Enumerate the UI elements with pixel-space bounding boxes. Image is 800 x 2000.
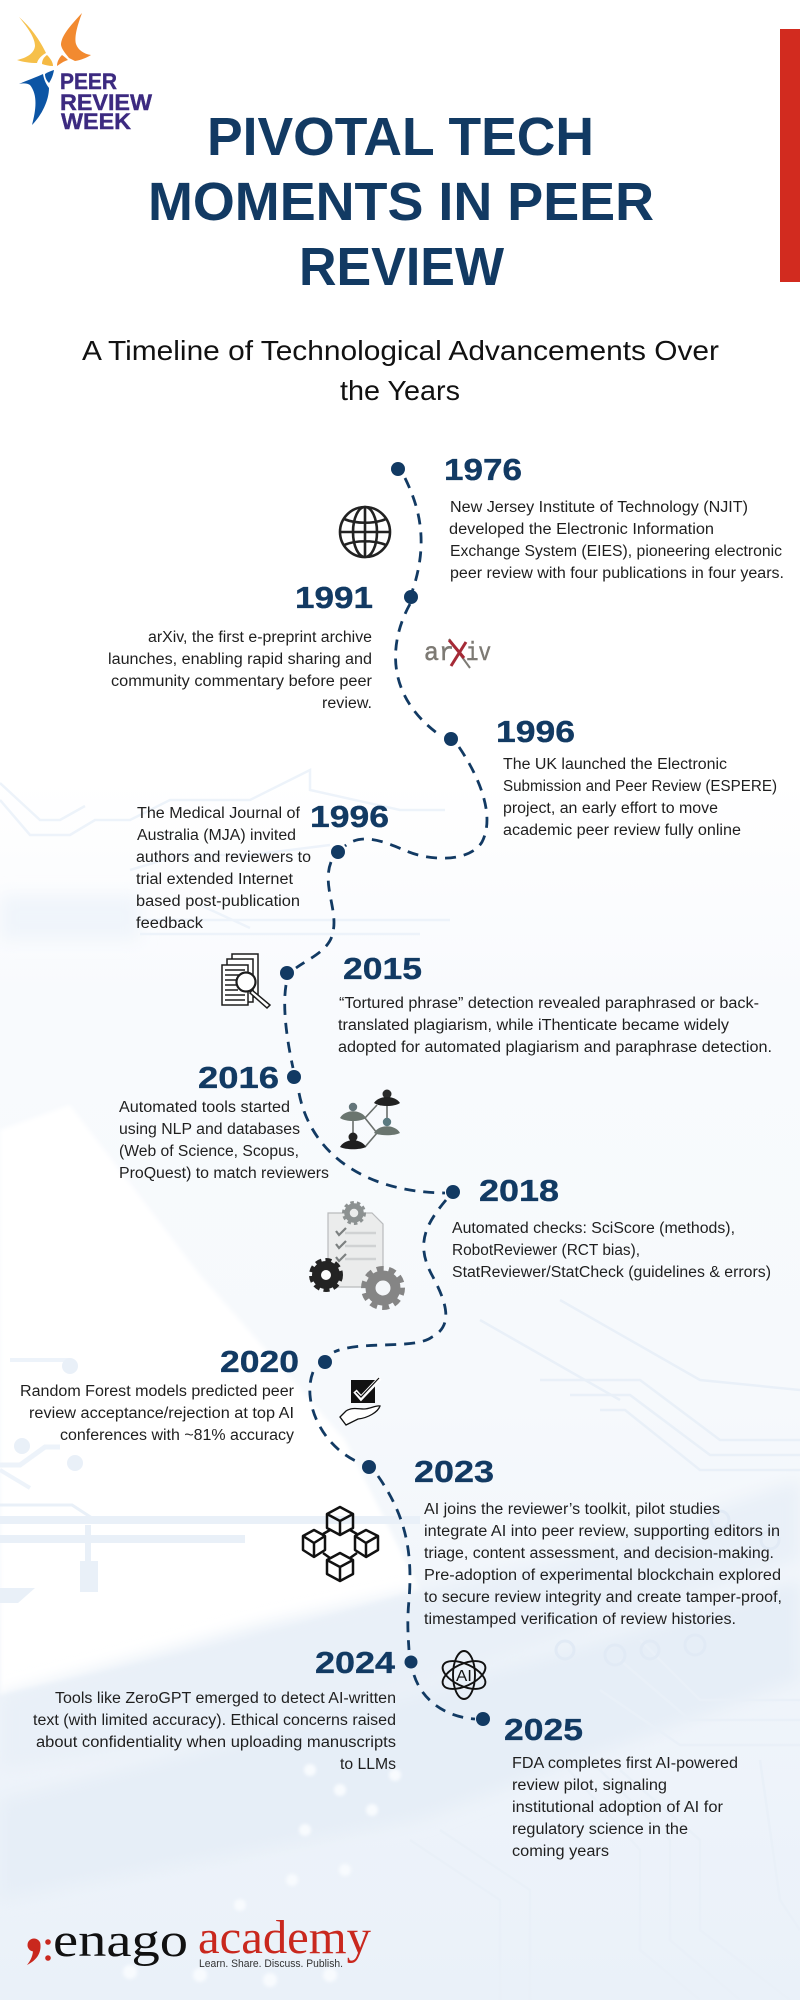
title: MOMENTS IN PEER xyxy=(148,172,654,232)
entry: 2025: institutional adoption of AI for xyxy=(512,1799,723,1816)
entry: 2020: 2020 xyxy=(220,1344,299,1379)
entry: 1976: developed the Electronic Information xyxy=(449,521,714,538)
entry: 2015: translated plagiarism, while iThenticate became widely xyxy=(338,1017,729,1034)
entry: 2015 xyxy=(338,951,772,1056)
entry: 2018: 2018 xyxy=(479,1173,559,1208)
entry: 1996 UK ESPERE: Submission and Peer Review (ESPERE) xyxy=(503,778,777,795)
entry: 1976 xyxy=(444,452,784,582)
entry: 1991 xyxy=(108,580,373,712)
entry: 2024: Tools like ZeroGPT emerged to detect AI-written xyxy=(55,1690,396,1707)
entry: 2015: adopted for automated plagiarism and paraphrase detection. xyxy=(338,1039,772,1056)
entry: 2024: 2024 xyxy=(315,1645,396,1680)
entry: 2016: (Web of Science, Scopus, xyxy=(119,1143,299,1160)
entry: 2018: RobotReviewer (RCT bias), xyxy=(452,1242,640,1259)
entry: 2024: about confidentiality when uploading manuscripts xyxy=(36,1734,396,1751)
entry: 1996 MJA: feedback xyxy=(136,915,203,932)
entry: 1976: 1976 xyxy=(444,452,522,487)
entry: 2018 xyxy=(452,1173,771,1281)
entry: 2023: to secure review integrity and create tamper-proof, xyxy=(424,1589,782,1606)
entry: 2016: ProQuest) to match reviewers xyxy=(119,1165,329,1182)
entry: 1996 MJA: trial extended Internet xyxy=(136,871,294,888)
entry: 1976: New Jersey Institute of Technology (NJIT) xyxy=(450,499,748,516)
title xyxy=(148,107,654,297)
entry: 2023: integrate AI into peer review, supporting editors in xyxy=(424,1523,780,1540)
logo: Peer Review Week xyxy=(17,13,152,134)
entry: 2023: triage, content assessment, and decision-making. xyxy=(424,1545,774,1562)
entry: 2025 xyxy=(504,1712,738,1860)
icon: AI atom: AI xyxy=(456,1668,472,1685)
entry: 2016: using NLP and databases xyxy=(119,1121,300,1138)
entry: 2025: 2025 xyxy=(504,1712,583,1747)
entry: 1996 MJA xyxy=(136,799,389,932)
logo: enago academy: Learn. Share. Discuss. Publish. xyxy=(199,1958,343,1970)
entry: 1996 UK ESPERE: project, an early effort to move xyxy=(503,800,718,817)
icon: AI atom xyxy=(439,1651,489,1699)
entry: 1996 MJA: 1996 xyxy=(310,799,389,834)
entry: 1976: peer review with four publications in four years. xyxy=(450,565,784,582)
entry: 2025: FDA completes first AI-powered xyxy=(512,1755,738,1772)
icon: arXiv logo xyxy=(424,638,491,668)
entry: 1996 UK ESPERE: academic peer review fully online xyxy=(503,822,741,839)
entry: 2023 xyxy=(414,1454,782,1628)
entry: 2016 xyxy=(119,1060,329,1182)
icon: people network xyxy=(340,1090,400,1149)
entry: 1991: launches, enabling rapid sharing and xyxy=(108,651,372,668)
red accent bar xyxy=(780,29,800,282)
entry: 1996 UK ESPERE xyxy=(496,714,777,839)
entry: 2020 xyxy=(20,1344,299,1444)
entry: 2016: Automated tools started xyxy=(119,1099,290,1116)
entry: 2020: review acceptance/rejection at top AI xyxy=(29,1405,294,1422)
entry: 2025: coming years xyxy=(512,1843,609,1860)
logo: enago academy: academy xyxy=(198,1911,371,1964)
icon: checkbox on hand xyxy=(340,1378,380,1425)
entry: 2024: text (with limited accuracy). Ethical concerns raised xyxy=(33,1712,396,1729)
entry: 1991: review. xyxy=(322,695,372,712)
logo: enago academy xyxy=(27,1911,371,1970)
logo: Peer Review Week: WEEK xyxy=(61,109,131,134)
entry: 2020: Random Forest models predicted peer xyxy=(20,1383,294,1400)
logo: Peer Review Week: REVIEW xyxy=(60,90,152,115)
title: PIVOTAL TECH xyxy=(207,107,594,167)
entry: 2018: StatReviewer/StatCheck (guidelines & errors) xyxy=(452,1264,771,1281)
entry: 1996 MJA: The Medical Journal of xyxy=(137,805,301,822)
subtitle: the Years xyxy=(340,375,460,406)
entry: 1996 MJA: Australia (MJA) invited xyxy=(137,827,296,844)
entry: 2024: to LLMs xyxy=(340,1756,396,1773)
icon: blockchain cubes xyxy=(303,1507,378,1581)
entry: 1996 MJA: based post-publication xyxy=(136,893,300,910)
entry: 1991: community commentary before peer xyxy=(111,673,372,690)
entry: 1996 UK ESPERE: 1996 xyxy=(496,714,575,749)
title: REVIEW xyxy=(299,237,504,297)
entry: 1991: 1991 xyxy=(295,580,373,615)
entry: 2023: AI joins the reviewer’s toolkit, pilot studies xyxy=(424,1501,720,1518)
entry: 1976: Exchange System (EIES), pioneering electronic xyxy=(450,543,782,560)
entry: 2025: regulatory science in the xyxy=(512,1821,688,1838)
icon: checklist and gears xyxy=(311,1202,402,1308)
subtitle xyxy=(82,335,719,406)
entry: 2015: 2015 xyxy=(343,951,422,986)
entry: 2024 xyxy=(33,1645,396,1773)
timeline: dashed path with dots xyxy=(280,462,490,1726)
icon: globe xyxy=(340,507,390,557)
entry: 2023: timestamped verification of review histories. xyxy=(424,1611,736,1628)
entry: 2025: review pilot, signaling xyxy=(512,1777,667,1794)
logo: enago academy: enago xyxy=(53,1914,188,1967)
icon: arXiv logo: iv xyxy=(466,638,491,668)
subtitle: A Timeline of Technological Advancements Over xyxy=(82,335,719,366)
entry: 2018: Automated checks: SciScore (methods), xyxy=(452,1220,735,1237)
icon: arXiv logo: ar xyxy=(424,638,454,668)
entry: 1991: arXiv, the first e-preprint archive xyxy=(148,629,372,646)
icon: documents with magnifier xyxy=(222,954,270,1008)
logo: Peer Review Week: PEER xyxy=(60,69,117,94)
entry: 1996 UK ESPERE: The UK launched the Electronic xyxy=(503,756,727,773)
entry: 2020: conferences with ~81% accuracy xyxy=(60,1427,294,1444)
entry: 2015: “Tortured phrase” detection revealed paraphrased or back- xyxy=(339,995,759,1012)
entry: 1996 MJA: authors and reviewers to xyxy=(136,849,311,866)
entry: 2016: 2016 xyxy=(198,1060,279,1095)
entry: 2023: 2023 xyxy=(414,1454,494,1489)
entry: 2023: Pre-adoption of experimental blockchain explored xyxy=(424,1567,781,1584)
